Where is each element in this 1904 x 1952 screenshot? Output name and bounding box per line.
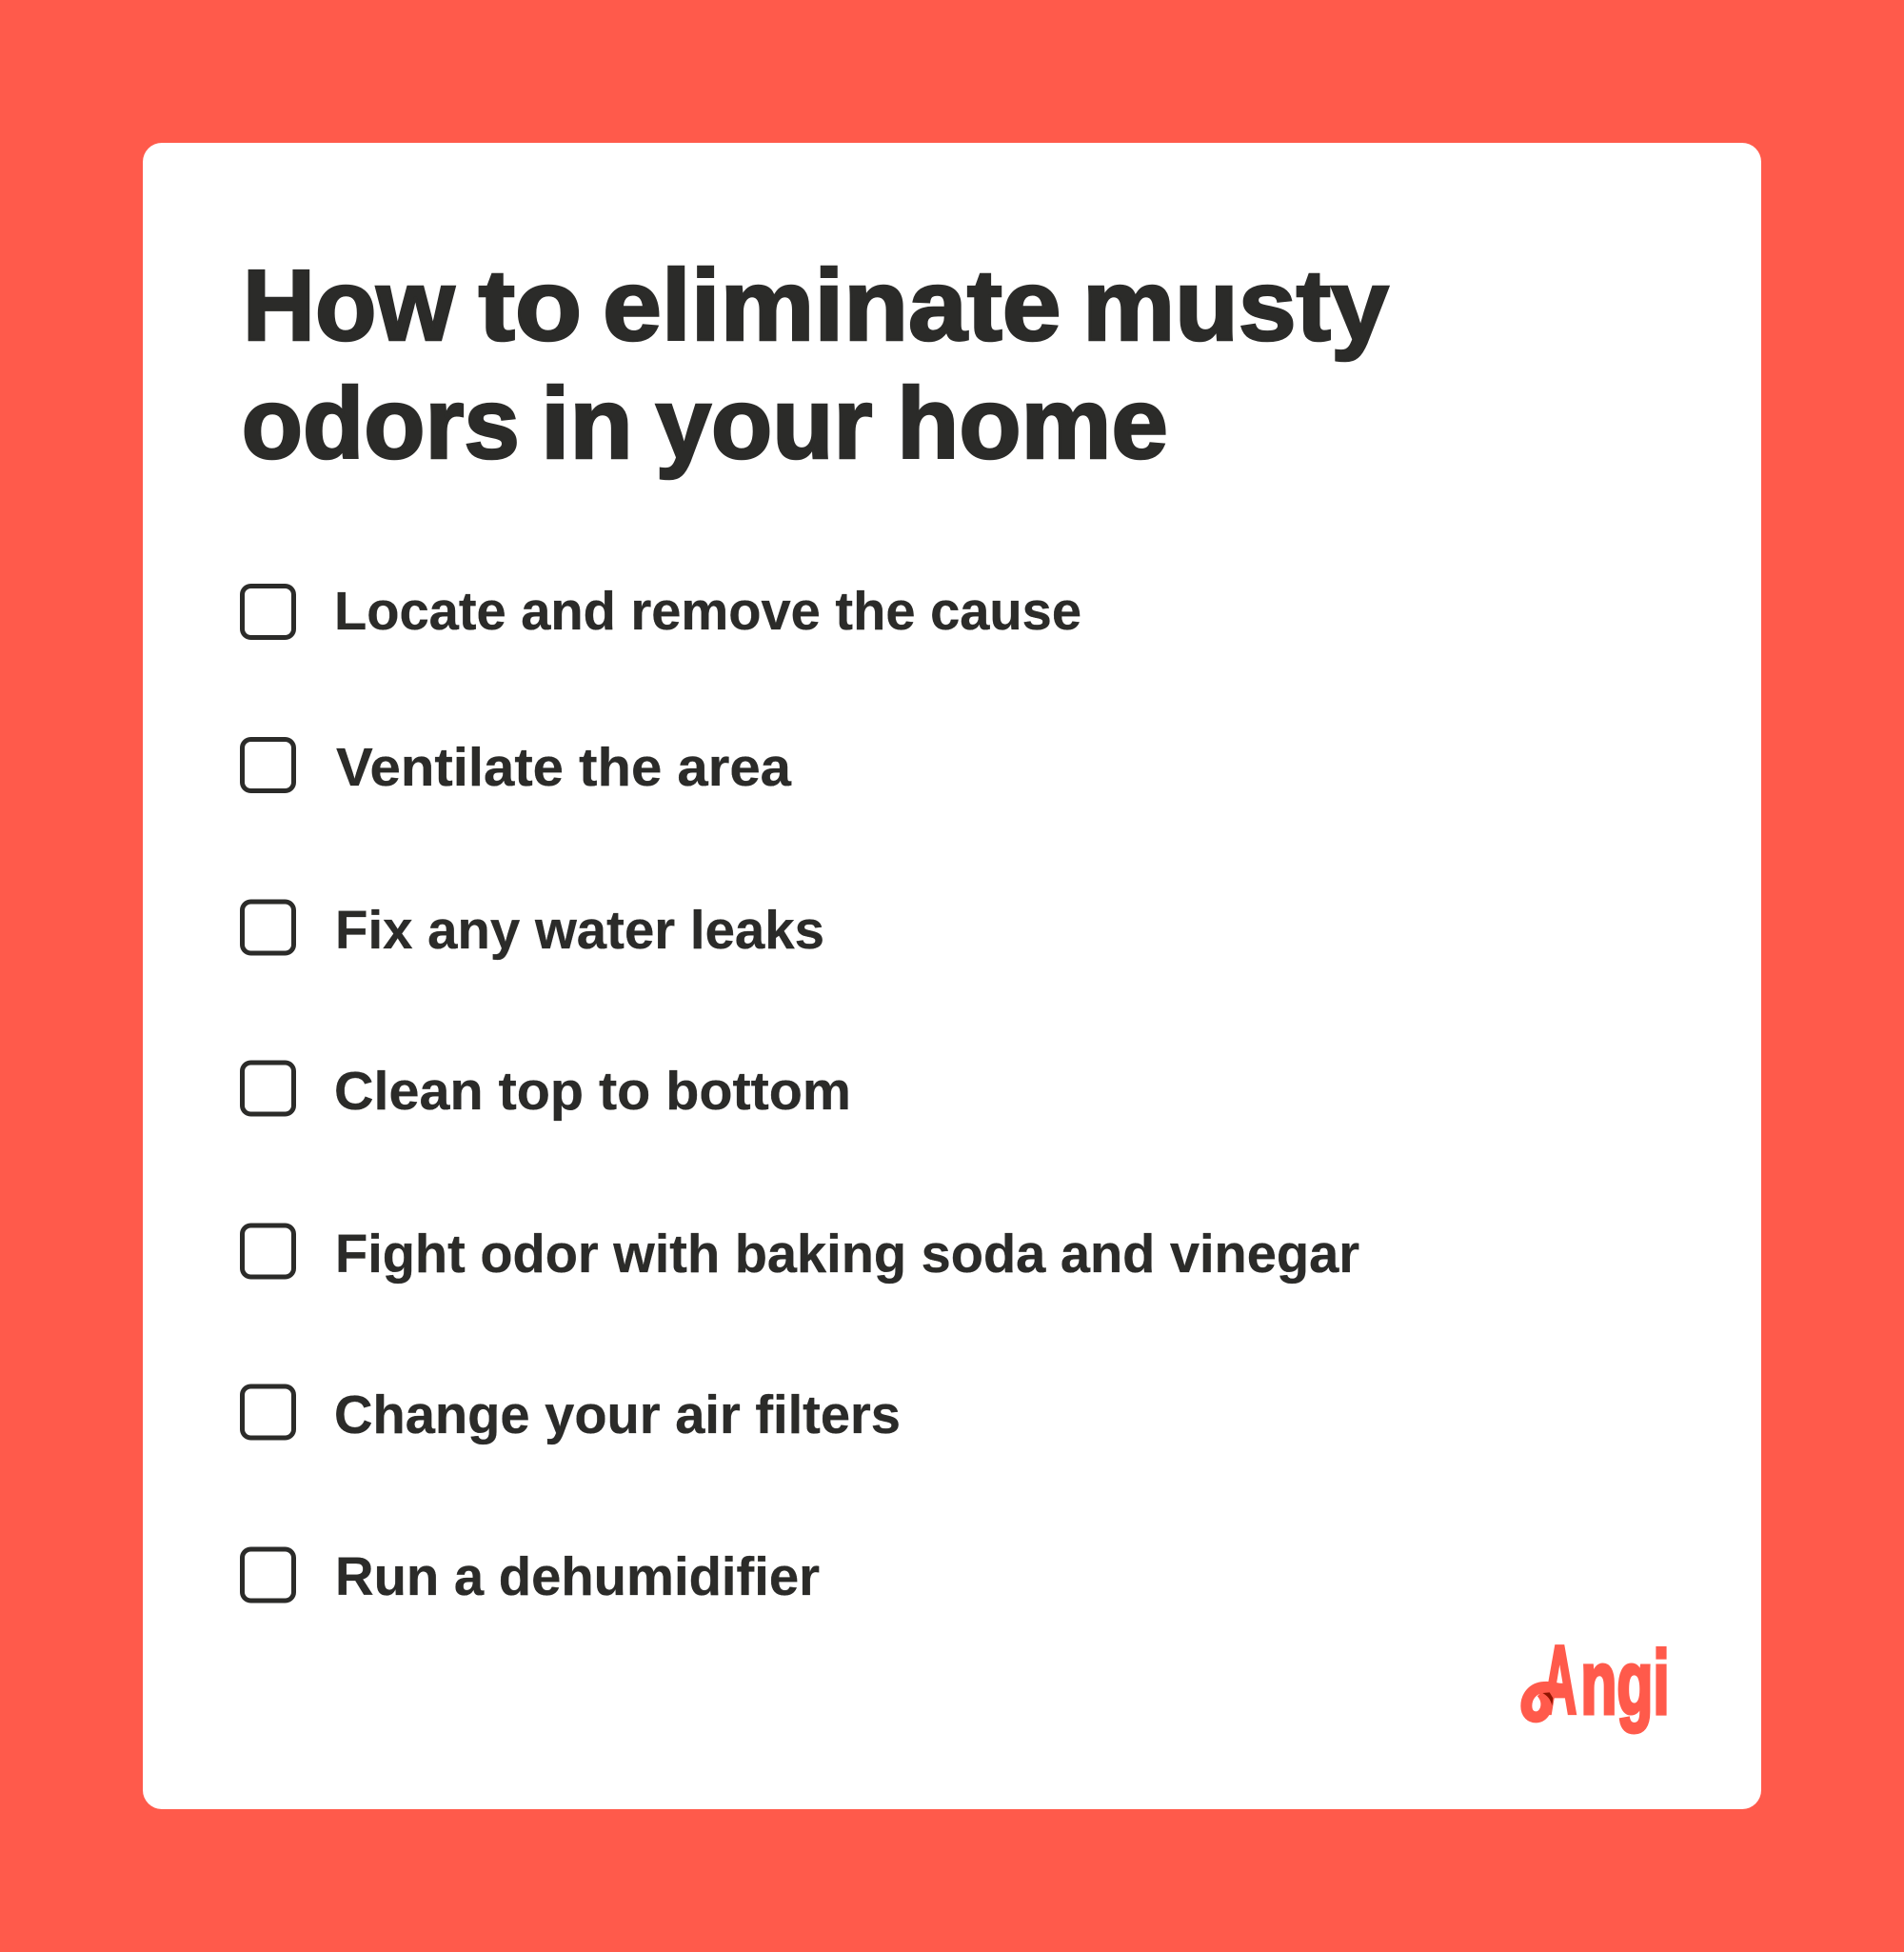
title: How	[243, 249, 455, 362]
title: odors	[242, 368, 520, 480]
logo: Angi: ngi	[1580, 1632, 1670, 1732]
item: fix any water leaks: Fix any water leaks	[335, 900, 824, 961]
logo: Angi: A	[1543, 1627, 1577, 1734]
title: in	[541, 368, 633, 480]
title	[242, 249, 1389, 480]
item: locate and remove the cause: Locate and remove the cause	[334, 581, 1081, 642]
panel: white card	[143, 143, 1761, 1809]
title: musty	[1082, 249, 1389, 362]
title: your	[656, 368, 872, 480]
item: change your air filters: Change your air filters	[334, 1384, 901, 1445]
item: run a dehumidifier: Run a dehumidifier	[335, 1546, 820, 1607]
title: home	[897, 368, 1168, 480]
title: eliminate	[603, 249, 1061, 362]
item: clean top to bottom: Clean top to bottom	[334, 1061, 851, 1122]
item: ventilate the area: Ventilate the area	[336, 737, 792, 798]
logo: Angi	[1526, 1627, 1670, 1734]
checklist	[242, 581, 1359, 1607]
title: to	[479, 249, 582, 362]
item: fight odor with baking soda and vinegar: Fight odor with baking soda and vinegar	[335, 1224, 1359, 1285]
